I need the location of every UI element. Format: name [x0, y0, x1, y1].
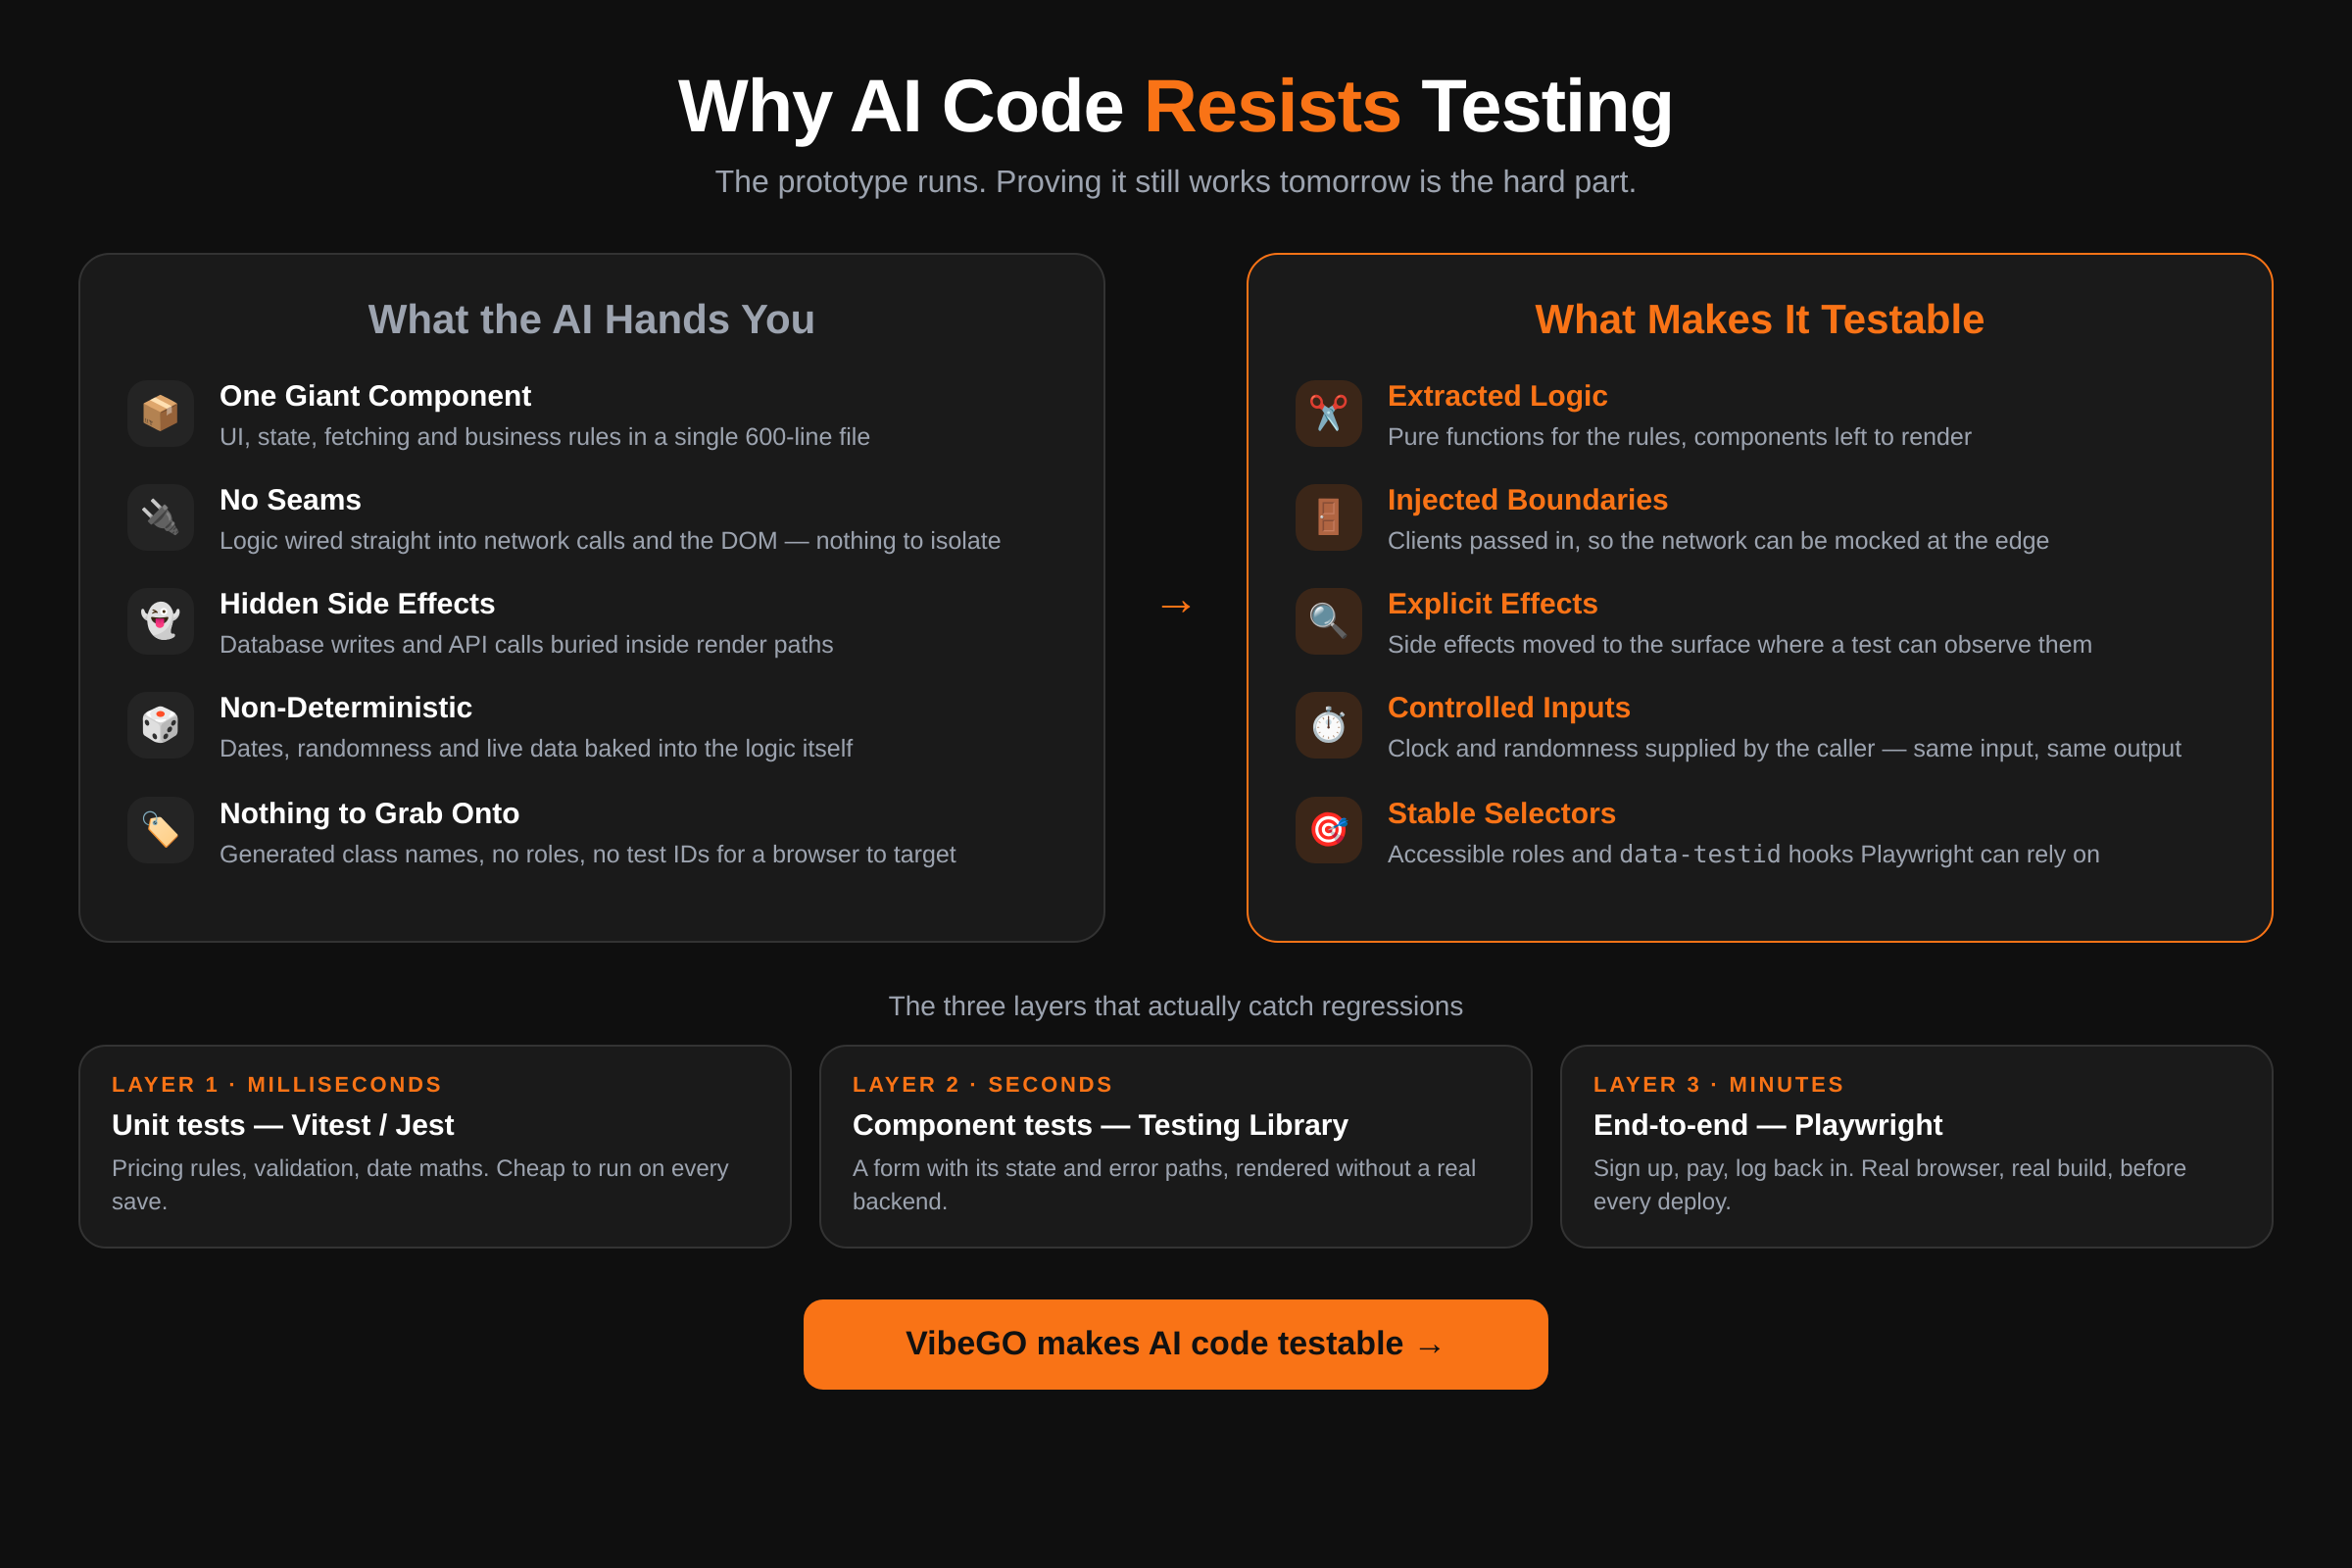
panel heading: what makes it testable: What Makes It Testable	[1535, 296, 1985, 342]
item: hidden side effects	[127, 588, 834, 659]
panel: what makes it testable	[1247, 253, 2274, 943]
card: layer 1	[78, 1045, 792, 1249]
card: layer 2: Component tests — Testing Library	[853, 1109, 1348, 1142]
panel: what the AI hands you	[78, 253, 1105, 943]
item: stable selectors: 🎯	[1308, 810, 1349, 850]
item: injected boundaries	[1296, 484, 2049, 555]
item: injected boundaries: Injected Boundaries	[1388, 484, 1669, 516]
item: explicit effects: Side effects moved to the surface where a test can observe them	[1388, 631, 2092, 659]
card: layer 3	[1560, 1045, 2274, 1249]
panel heading: what the AI hands you: What the AI Hands You	[368, 296, 815, 342]
item: hidden side effects: Hidden Side Effects	[220, 588, 496, 620]
item: one giant component: UI, state, fetching and business rules in a single 600-line file	[220, 423, 870, 451]
item: injected boundaries: 🚪	[1308, 498, 1349, 537]
item: one giant component	[127, 380, 870, 451]
card: layer 1: LAYER 1 · MILLISECONDS	[112, 1072, 443, 1097]
title: Why AI Code Resists Testing	[678, 65, 1674, 148]
item: no seams	[127, 484, 1002, 555]
item: controlled inputs: ⏱️	[1308, 706, 1349, 745]
item: stable selectors	[1296, 797, 2100, 868]
arrow between panels: →	[1152, 573, 1200, 625]
subtitle: The prototype runs. Proving it still works tomorrow is the hard part.	[715, 164, 1637, 199]
item: non-deterministic: Non-Deterministic	[220, 692, 472, 724]
item: extracted logic: Pure functions for the rules, components left to render	[1388, 423, 1972, 451]
item: controlled inputs: Controlled Inputs	[1388, 692, 1631, 724]
item: hidden side effects: Database writes and API calls buried inside render paths	[220, 631, 834, 659]
card: layer 2: A form with its state and error paths, rendered without a real backend.	[853, 1155, 1476, 1215]
item: explicit effects	[1296, 588, 2092, 659]
item: nothing to grab onto: Nothing to Grab Onto	[220, 798, 520, 830]
card: layer 2: LAYER 2 · SECONDS	[853, 1072, 1114, 1097]
card: layer 3: LAYER 3 · MINUTES	[1593, 1072, 1845, 1097]
item: hidden side effects: 👻	[140, 602, 181, 641]
item: nothing to grab onto: Generated class names, no roles, no test IDs for a browser to target	[220, 841, 956, 868]
card: layer 3: End-to-end — Playwright	[1593, 1109, 1943, 1142]
item: no seams: Logic wired straight into network calls and the DOM — nothing to isolate	[220, 527, 1002, 555]
item: nothing to grab onto	[127, 797, 956, 868]
item: no seams: 🔌	[140, 498, 181, 537]
item: non-deterministic	[127, 692, 853, 762]
item: non-deterministic: Dates, randomness and live data baked into the logic itself	[220, 735, 853, 762]
section label: three layers: The three layers that actually catch regressions	[889, 991, 1463, 1021]
card: layer 1: Unit tests — Vitest / Jest	[112, 1109, 455, 1142]
item: stable selectors: Accessible roles and data-testid hooks Playwright can rely on	[1388, 840, 2100, 868]
item: extracted logic: Extracted Logic	[1388, 380, 1608, 413]
item: extracted logic: ✂️	[1308, 394, 1349, 433]
item: controlled inputs: Clock and randomness supplied by the caller — same input, same output	[1388, 735, 2181, 762]
card: layer 1: Pricing rules, validation, date maths. Cheap to run on every save.	[112, 1155, 729, 1215]
item: explicit effects: 🔍	[1308, 602, 1349, 641]
item: no seams: No Seams	[220, 484, 362, 516]
item: stable selectors: Stable Selectors	[1388, 798, 1616, 830]
item: one giant component: 📦	[140, 394, 181, 433]
card: layer 3: Sign up, pay, log back in. Real browser, real build, before every deploy.	[1593, 1155, 2186, 1215]
call to action button	[804, 1299, 1548, 1390]
card: layer 2	[819, 1045, 1533, 1249]
item: one giant component: One Giant Component	[220, 380, 531, 413]
item: nothing to grab onto: 🏷️	[140, 810, 181, 850]
call to action button: VibeGO makes AI code testable →	[906, 1325, 1446, 1362]
item: non-deterministic: 🎲	[140, 706, 181, 745]
item: controlled inputs	[1296, 692, 2181, 762]
item: extracted logic	[1296, 380, 1972, 451]
item: explicit effects: Explicit Effects	[1388, 588, 1598, 620]
item: injected boundaries: Clients passed in, so the network can be mocked at the edge	[1388, 527, 2049, 555]
